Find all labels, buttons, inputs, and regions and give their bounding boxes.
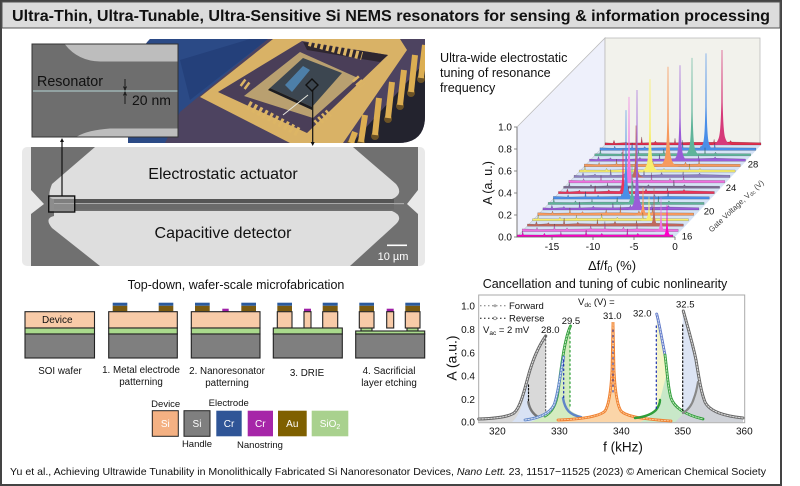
curve labels: 31.0 — [603, 311, 622, 322]
citation: Yu et al., Achieving Ultrawide Tunability in Monolithically Fabricated Si Nanoresonator Devices, Nano Lett. 23, 11517−11525 (2023) © American Chemical Society — [10, 466, 767, 478]
curve labels: V — [578, 297, 584, 308]
step labels: 2. Nanoresonator — [189, 366, 266, 377]
inset: resonator SEM — [32, 44, 178, 137]
y tick labels: 0.6 — [461, 348, 475, 359]
x tick labels — [489, 426, 753, 438]
y tick labels: 1.0 — [461, 302, 475, 312]
diagram: step 3 — [273, 303, 342, 358]
step labels — [38, 365, 417, 389]
arrow to inset — [60, 138, 64, 196]
step labels: patterning — [119, 377, 163, 388]
axis title: amplitude: A (a. u.) — [481, 161, 495, 205]
x tick labels: 340 — [613, 426, 630, 438]
voltage tick labels: 24 — [726, 183, 736, 194]
heading: tuning plot — [440, 51, 567, 95]
step labels: patterning — [205, 378, 249, 389]
title bar: Ultra-Thin, Ultra-Tunable, Ultra-Sensitive Si NEMS resonators for sensing & information processing — [12, 8, 770, 25]
curve labels: 32.5 — [676, 300, 694, 311]
legend: materials: Si — [161, 419, 170, 430]
voltage tick labels: 20 — [704, 206, 714, 218]
legend: materials: Au — [286, 419, 298, 430]
scale bar — [378, 244, 408, 263]
curve labels: dc — [584, 302, 592, 309]
axes and ticks — [514, 127, 675, 240]
y tick labels: 0.0 — [461, 418, 475, 428]
y tick labels: 0.2 — [461, 395, 475, 406]
legend: materials: Cr — [224, 419, 235, 430]
legend: materials: Nanostring — [237, 440, 283, 451]
x tick labels: 330 — [551, 426, 568, 438]
chip marker and arrow — [306, 79, 318, 146]
y tick labels: 0.2 — [498, 210, 512, 222]
voltage tick labels: 16 — [682, 232, 692, 242]
title bar — [2, 2, 780, 28]
blue and green curves 32.0 — [635, 314, 703, 419]
y tick labels: 0.4 — [498, 188, 512, 200]
step labels: 4. Sacrificial — [363, 366, 415, 377]
x tick labels: 350 — [674, 426, 691, 438]
y tick labels: 0.8 — [498, 144, 512, 156]
orange curve 31.0 — [558, 322, 671, 421]
legend: forward and reverse: = 2 mV — [496, 325, 530, 336]
heading: microfabrication: Top-down, wafer-scale microfabrication — [128, 278, 344, 292]
curve fills — [479, 311, 743, 422]
axis title: gate voltage: (V) — [751, 178, 766, 193]
step labels: 3. DRIE — [290, 368, 325, 379]
legend: materials: Handle — [182, 439, 212, 450]
diagram: step 2 — [191, 303, 260, 358]
step labels: SOI wafer — [38, 366, 83, 377]
legend: forward and reverse: Forward — [509, 301, 544, 312]
y axis title: A (a.u.) — [444, 335, 460, 381]
axis title: frequency shift: 0 — [607, 264, 612, 274]
voltage tick labels: 28 — [748, 160, 758, 170]
x tick labels: -10 — [586, 242, 601, 253]
diagram: SOI wafer: Device — [42, 315, 73, 326]
legend: materials: Si — [193, 419, 201, 430]
y tick labels — [498, 122, 512, 244]
panel: SEM device image — [22, 147, 425, 266]
gray curve 32.5 — [683, 311, 743, 418]
legend: forward and reverse: Reverse — [509, 314, 544, 325]
step labels: 1. Metal electrode — [102, 365, 180, 376]
label: capacitive detector: Capacitive detector — [155, 225, 292, 242]
axis title: frequency shift: Δf/f — [588, 258, 607, 273]
y tick labels: 0.8 — [461, 325, 475, 336]
diagram: step 1 — [109, 303, 177, 358]
x tick labels — [545, 242, 678, 253]
chart: frequency response curves — [444, 295, 753, 455]
legend: forward and reverse: V — [483, 325, 489, 336]
voltage tick labels — [682, 160, 758, 242]
heading: tuning plot: tuning of resonance — [440, 66, 551, 80]
step labels: layer etching — [361, 378, 417, 389]
gray curve 28.0 — [479, 336, 546, 419]
axis title: frequency shift: (%) — [612, 258, 636, 273]
zoom box — [49, 196, 75, 212]
x tick labels: 360 — [736, 426, 753, 438]
diagram: step 4 — [356, 303, 425, 358]
green and blue curves 29.5 — [525, 326, 581, 420]
x tick labels: 0 — [672, 242, 678, 253]
y tick labels: 0.6 — [498, 166, 512, 178]
y tick labels: 0.4 — [461, 372, 475, 383]
legend: materials: SiO — [320, 419, 336, 430]
legend: materials: Device — [151, 399, 180, 410]
x tick labels: -5 — [630, 242, 639, 253]
photo: packaged chip — [128, 39, 425, 147]
heading: tuning plot: Ultra-wide electrostatic — [440, 51, 567, 65]
thickness arrows — [124, 79, 126, 104]
legend: materials: 2 — [336, 424, 340, 431]
x tick labels: 320 — [489, 426, 506, 438]
curve labels: 32.0 — [633, 309, 652, 320]
diagram: SOI wafer — [25, 312, 94, 358]
y tick labels: 1.0 — [498, 122, 512, 134]
x axis title: f (kHz) — [603, 440, 643, 455]
heading: nonlinearity plot: Cancellation and tuning of cubic nonlinearity — [483, 277, 728, 291]
curve labels: (V) = — [591, 297, 615, 308]
inset: resonator SEM: Resonator — [37, 74, 103, 90]
legend: materials: Electrode — [209, 398, 249, 409]
curve labels — [541, 297, 694, 336]
curve labels: 28.0 — [541, 325, 560, 336]
chart: 3D waterfall spectra — [481, 38, 767, 274]
legend: materials: Cr — [255, 419, 266, 430]
y tick labels — [461, 302, 475, 428]
label: electrostatic actuator: Electrostatic actuator — [148, 166, 298, 183]
heading: tuning plot: frequency — [440, 81, 496, 95]
legend: materials — [151, 398, 348, 451]
scale bar: 10 µm — [378, 251, 408, 263]
axis title: gate voltage: Gate Voltage, V — [707, 191, 752, 234]
x tick labels: -15 — [545, 242, 560, 253]
inset: resonator SEM: 20 nm — [132, 92, 171, 108]
y tick labels: 0.0 — [498, 232, 512, 244]
axis title: gate voltage: dc — [749, 190, 758, 198]
legend: forward and reverse: ac — [489, 330, 497, 337]
legend: forward and reverse — [480, 301, 544, 337]
curve labels: 29.5 — [562, 316, 580, 327]
